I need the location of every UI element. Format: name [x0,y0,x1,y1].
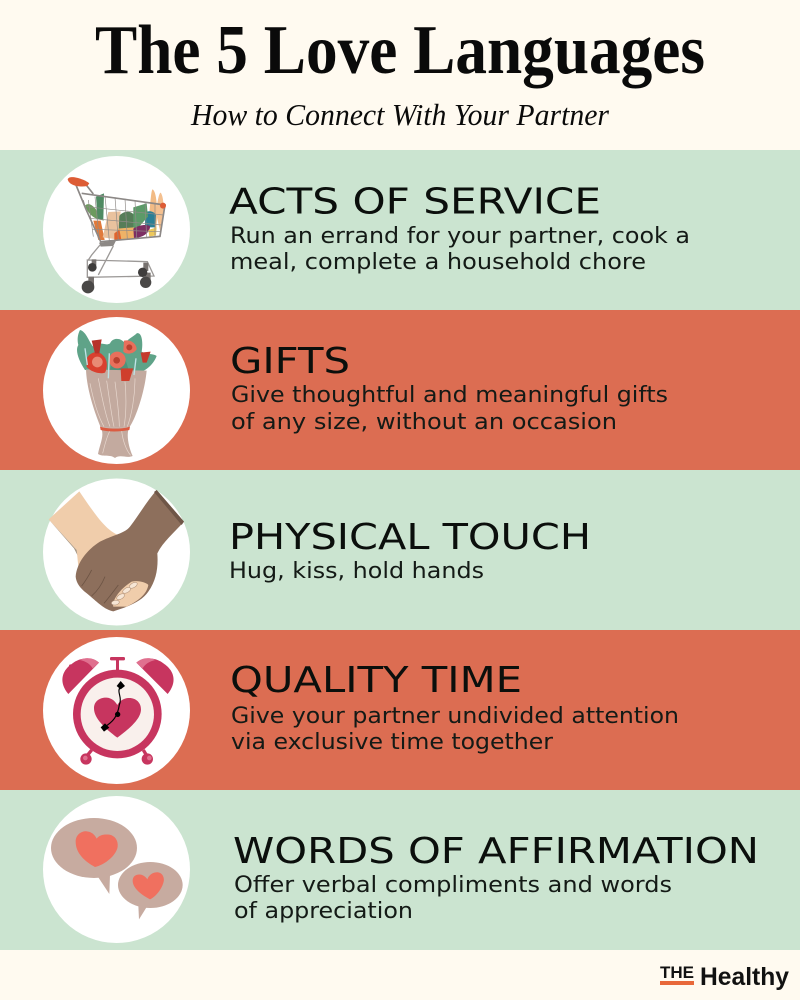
icon: holding hands [49,490,184,611]
icon: shopping cart [68,177,166,293]
icon: speech bubbles with hearts [51,818,183,919]
panel: quality time [0,630,800,790]
heading: words of affirmation: WORDS OF AFFIRMATION [233,831,759,872]
heading: acts of service: ACTS OF SERVICE [229,182,601,222]
description: gifts: Give thoughtful and meaningful gifts [231,383,668,408]
subtitle: How to Connect With Your Partner [190,97,610,132]
logo: The Healthy: THE [660,964,694,982]
description: quality time: via exclusive time together [231,730,554,755]
description: physical touch: Hug, kiss, hold hands [229,559,484,584]
description: acts of service: Run an errand for your partner, cook a [230,224,690,249]
icon: bouquet [77,330,157,458]
panel: acts of service [0,150,800,310]
description: gifts: of any size, without an occasion [231,410,617,435]
description: quality time: Give your partner undivided attention [231,704,679,729]
description: words of affirmation [234,873,672,924]
description: gifts [231,383,668,435]
logo: The Healthy: Healthy [700,963,789,991]
description: acts of service: meal, complete a household chore [230,250,646,275]
panel: words of affirmation [0,790,800,950]
description: acts of service [230,224,690,275]
logo: The Healthy [660,963,789,991]
heading: physical touch: PHYSICAL TOUCH [229,517,591,558]
icon: alarm clock with heart [62,657,174,765]
panel: gifts [0,310,800,470]
description: quality time [231,704,679,755]
description: words of affirmation: Offer verbal compliments and words [234,873,672,898]
panel: physical touch [0,470,800,630]
heading: gifts: GIFTS [230,341,350,382]
title: The 5 Love Languages [95,12,705,89]
heading: quality time: QUALITY TIME [230,660,522,701]
description: words of affirmation: of appreciation [234,899,413,924]
